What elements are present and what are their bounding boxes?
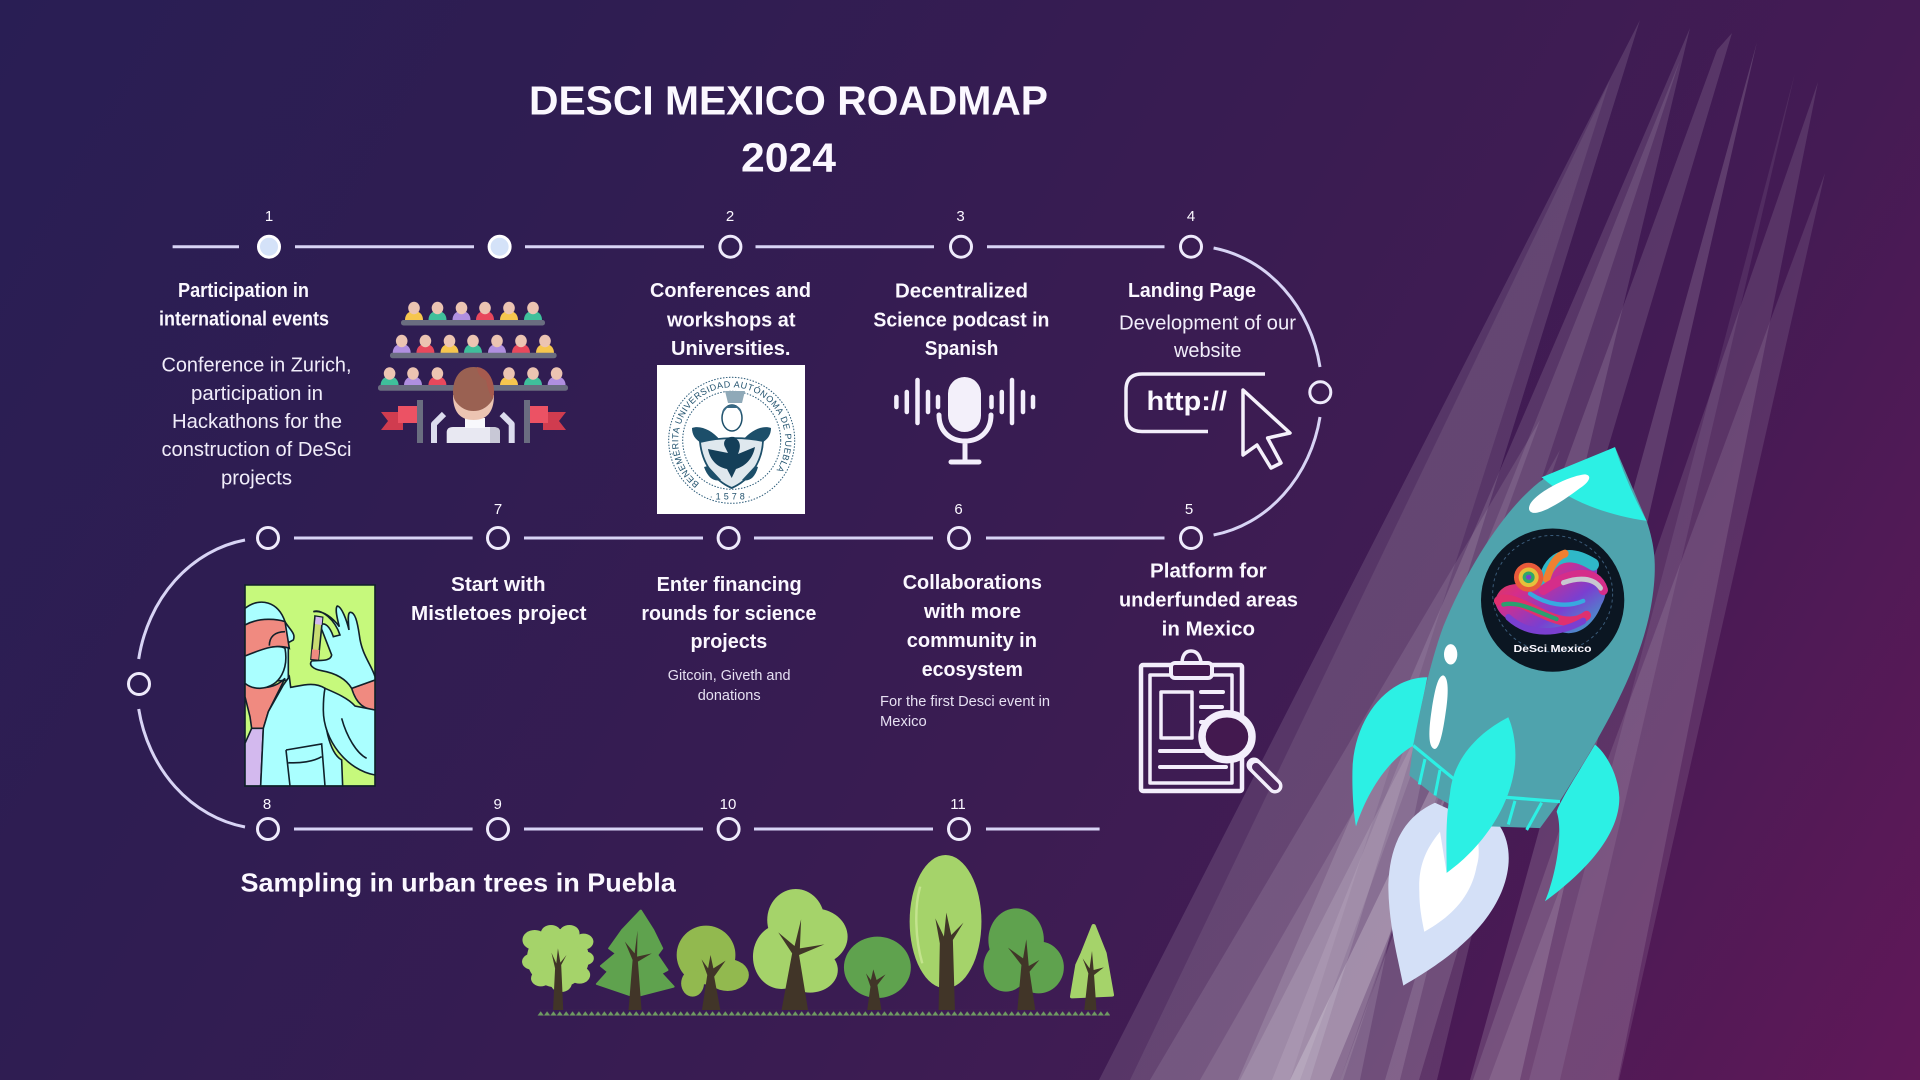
step 4 text: landing page: Development of our — [1119, 312, 1296, 334]
step 6 text: collaborations — [880, 572, 1050, 730]
step 1 text: international events: projects — [221, 468, 292, 490]
logo disc — [1481, 529, 1624, 672]
step 4 text: landing page: Landing Page — [1128, 280, 1256, 302]
title: 2024 — [741, 134, 836, 180]
step finance text: financing rounds: Enter financing — [657, 574, 802, 596]
step 7 text: mistletoes: Mistletoes project — [411, 603, 587, 625]
icon: university seal: BENEMÉRITA UNIVERSIDAD AUTÓNOMA DE PUEBLA — [672, 381, 792, 488]
rocket exhaust streaks — [1099, 20, 1825, 1080]
text: sampling in urban trees: Sampling in urban trees in Puebla — [240, 868, 676, 898]
step finance text: financing rounds: rounds for science — [641, 603, 816, 625]
step 7 text: mistletoes: Start with — [451, 574, 546, 596]
step 1 text: international events — [159, 280, 352, 490]
step numbers — [263, 208, 1195, 813]
timeline track — [139, 247, 1320, 829]
illustration: row of trees — [522, 855, 1112, 1016]
step numbers: 9 — [494, 796, 502, 813]
step finance text: financing rounds — [641, 574, 816, 704]
step numbers: 5 — [1185, 501, 1193, 518]
title — [529, 78, 1048, 180]
icon: university seal: ·1578· — [710, 492, 754, 502]
step numbers: 10 — [720, 796, 736, 813]
step 7 text: mistletoes — [411, 574, 587, 625]
step numbers: 3 — [956, 208, 965, 225]
step 6 text: collaborations: For the first Desci event in — [880, 693, 1050, 710]
step 2 text: universities — [650, 280, 811, 360]
icon: audience and speaker — [378, 302, 568, 443]
step 4 text: landing page — [1119, 280, 1296, 362]
step numbers: 1 — [265, 208, 273, 225]
step finance text: financing rounds: Gitcoin, Giveth and — [668, 667, 790, 684]
front fin — [1446, 717, 1515, 873]
step 1 text: international events: construction of DeSci — [162, 439, 352, 461]
logo text: DeSci Mexico — [1514, 643, 1592, 655]
step 5 text: platform: Platform for — [1150, 561, 1267, 583]
rear fins — [1352, 677, 1619, 901]
title: DESCI MEXICO ROADMAP — [529, 78, 1048, 124]
step 6 text: collaborations: community in — [907, 630, 1037, 652]
step 3 text: podcast: Decentralized — [895, 280, 1028, 302]
step numbers: 2 — [726, 208, 734, 225]
nose cone — [1542, 447, 1647, 521]
flame — [1388, 803, 1509, 986]
step 6 text: collaborations: Collaborations — [903, 572, 1042, 594]
step 6 text: collaborations: ecosystem — [922, 659, 1023, 681]
step 1 text: international events: Conference in Zurich, — [162, 354, 352, 376]
step numbers: 11 — [950, 796, 966, 813]
icon: clipboard with magnifier — [1141, 651, 1275, 791]
step 5 text: platform: underfunded areas — [1119, 590, 1298, 612]
illustration: scientist with test tube — [245, 585, 375, 786]
step numbers: 7 — [494, 501, 502, 518]
step numbers: 8 — [263, 796, 271, 813]
step finance text: financing rounds: projects — [690, 631, 767, 653]
step 6 text: collaborations: Mexico — [880, 713, 927, 730]
timeline nodes — [128, 236, 1331, 839]
rocket body — [1409, 447, 1655, 828]
step 1 text: international events: Participation in — [178, 280, 309, 302]
icon: university seal — [657, 365, 805, 514]
step 1 text: international events: participation in — [191, 383, 323, 405]
step 6 text: collaborations: with more — [923, 601, 1021, 623]
illustration: rocket — [1352, 447, 1655, 986]
step 3 text: podcast — [873, 280, 1049, 360]
icon: url box and cursor: http:// — [1146, 386, 1228, 416]
icon: url box and cursor — [1126, 374, 1290, 468]
step 5 text: platform: in Mexico — [1162, 619, 1255, 641]
step finance text: financing rounds: donations — [698, 687, 761, 704]
body highlights — [1429, 644, 1457, 749]
step 1 text: international events: international events — [159, 308, 329, 330]
step 3 text: podcast: Spanish — [925, 338, 998, 360]
step 2 text: universities: Universities. — [671, 338, 790, 360]
step 3 text: podcast: Science podcast in — [873, 310, 1049, 332]
step 2 text: universities: Conferences and — [650, 280, 811, 302]
step 1 text: international events: Hackathons for the — [172, 411, 342, 433]
step numbers: 6 — [954, 501, 963, 518]
engine band — [1413, 746, 1560, 830]
step 2 text: universities: workshops at — [666, 310, 796, 332]
icon: microphone — [896, 377, 1033, 462]
step numbers: 4 — [1187, 208, 1195, 225]
step 4 text: landing page: website — [1173, 340, 1242, 362]
step 5 text: platform — [1119, 561, 1298, 641]
nose highlight — [1529, 474, 1589, 513]
